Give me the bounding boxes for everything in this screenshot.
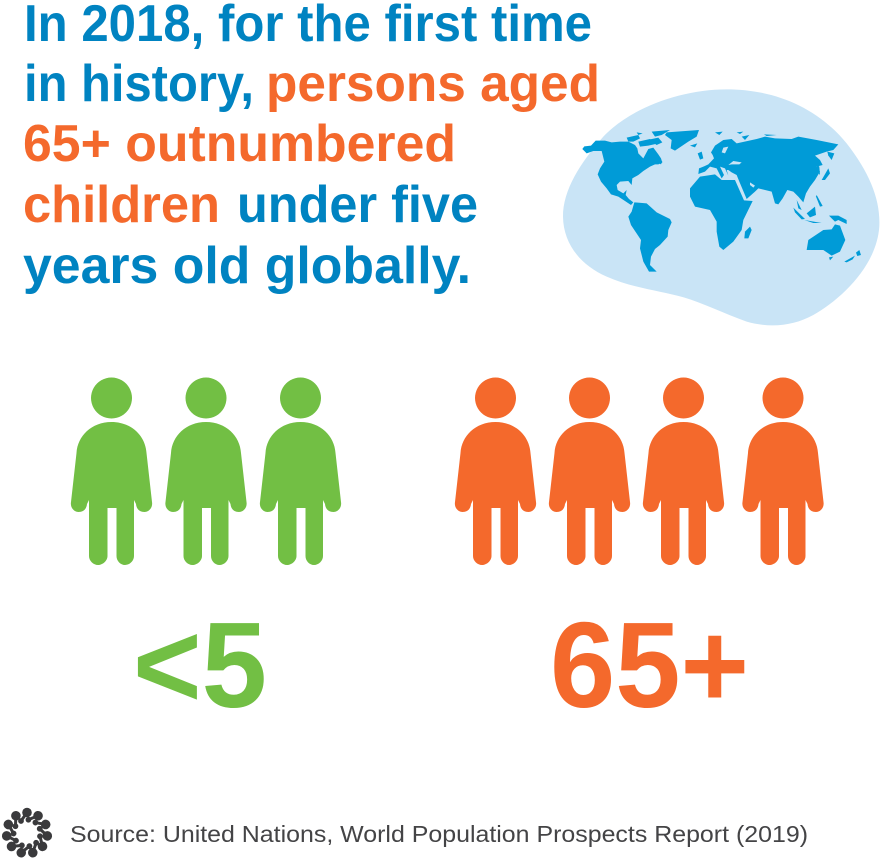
Americas and Greenland xyxy=(582,130,699,272)
icon: organisation logo xyxy=(0,807,53,860)
source note: Source: United Nations, World Population Prospects Report (2019) xyxy=(70,821,808,847)
title: persons aged xyxy=(266,55,600,113)
map background blob xyxy=(563,89,879,325)
title: years old globally. xyxy=(23,237,471,295)
Old World xyxy=(690,132,861,262)
icons: three green figures xyxy=(71,378,341,565)
icon: world map on blob xyxy=(563,89,879,325)
title: in history, xyxy=(24,55,254,113)
label: under five: <5 xyxy=(133,597,267,733)
title: children xyxy=(23,176,220,234)
label: 65 plus: 65+ xyxy=(550,597,749,733)
title xyxy=(23,0,600,295)
title: under five xyxy=(237,176,478,234)
title: 65+ outnumbered xyxy=(23,115,456,173)
icons: four orange figures xyxy=(455,378,824,565)
